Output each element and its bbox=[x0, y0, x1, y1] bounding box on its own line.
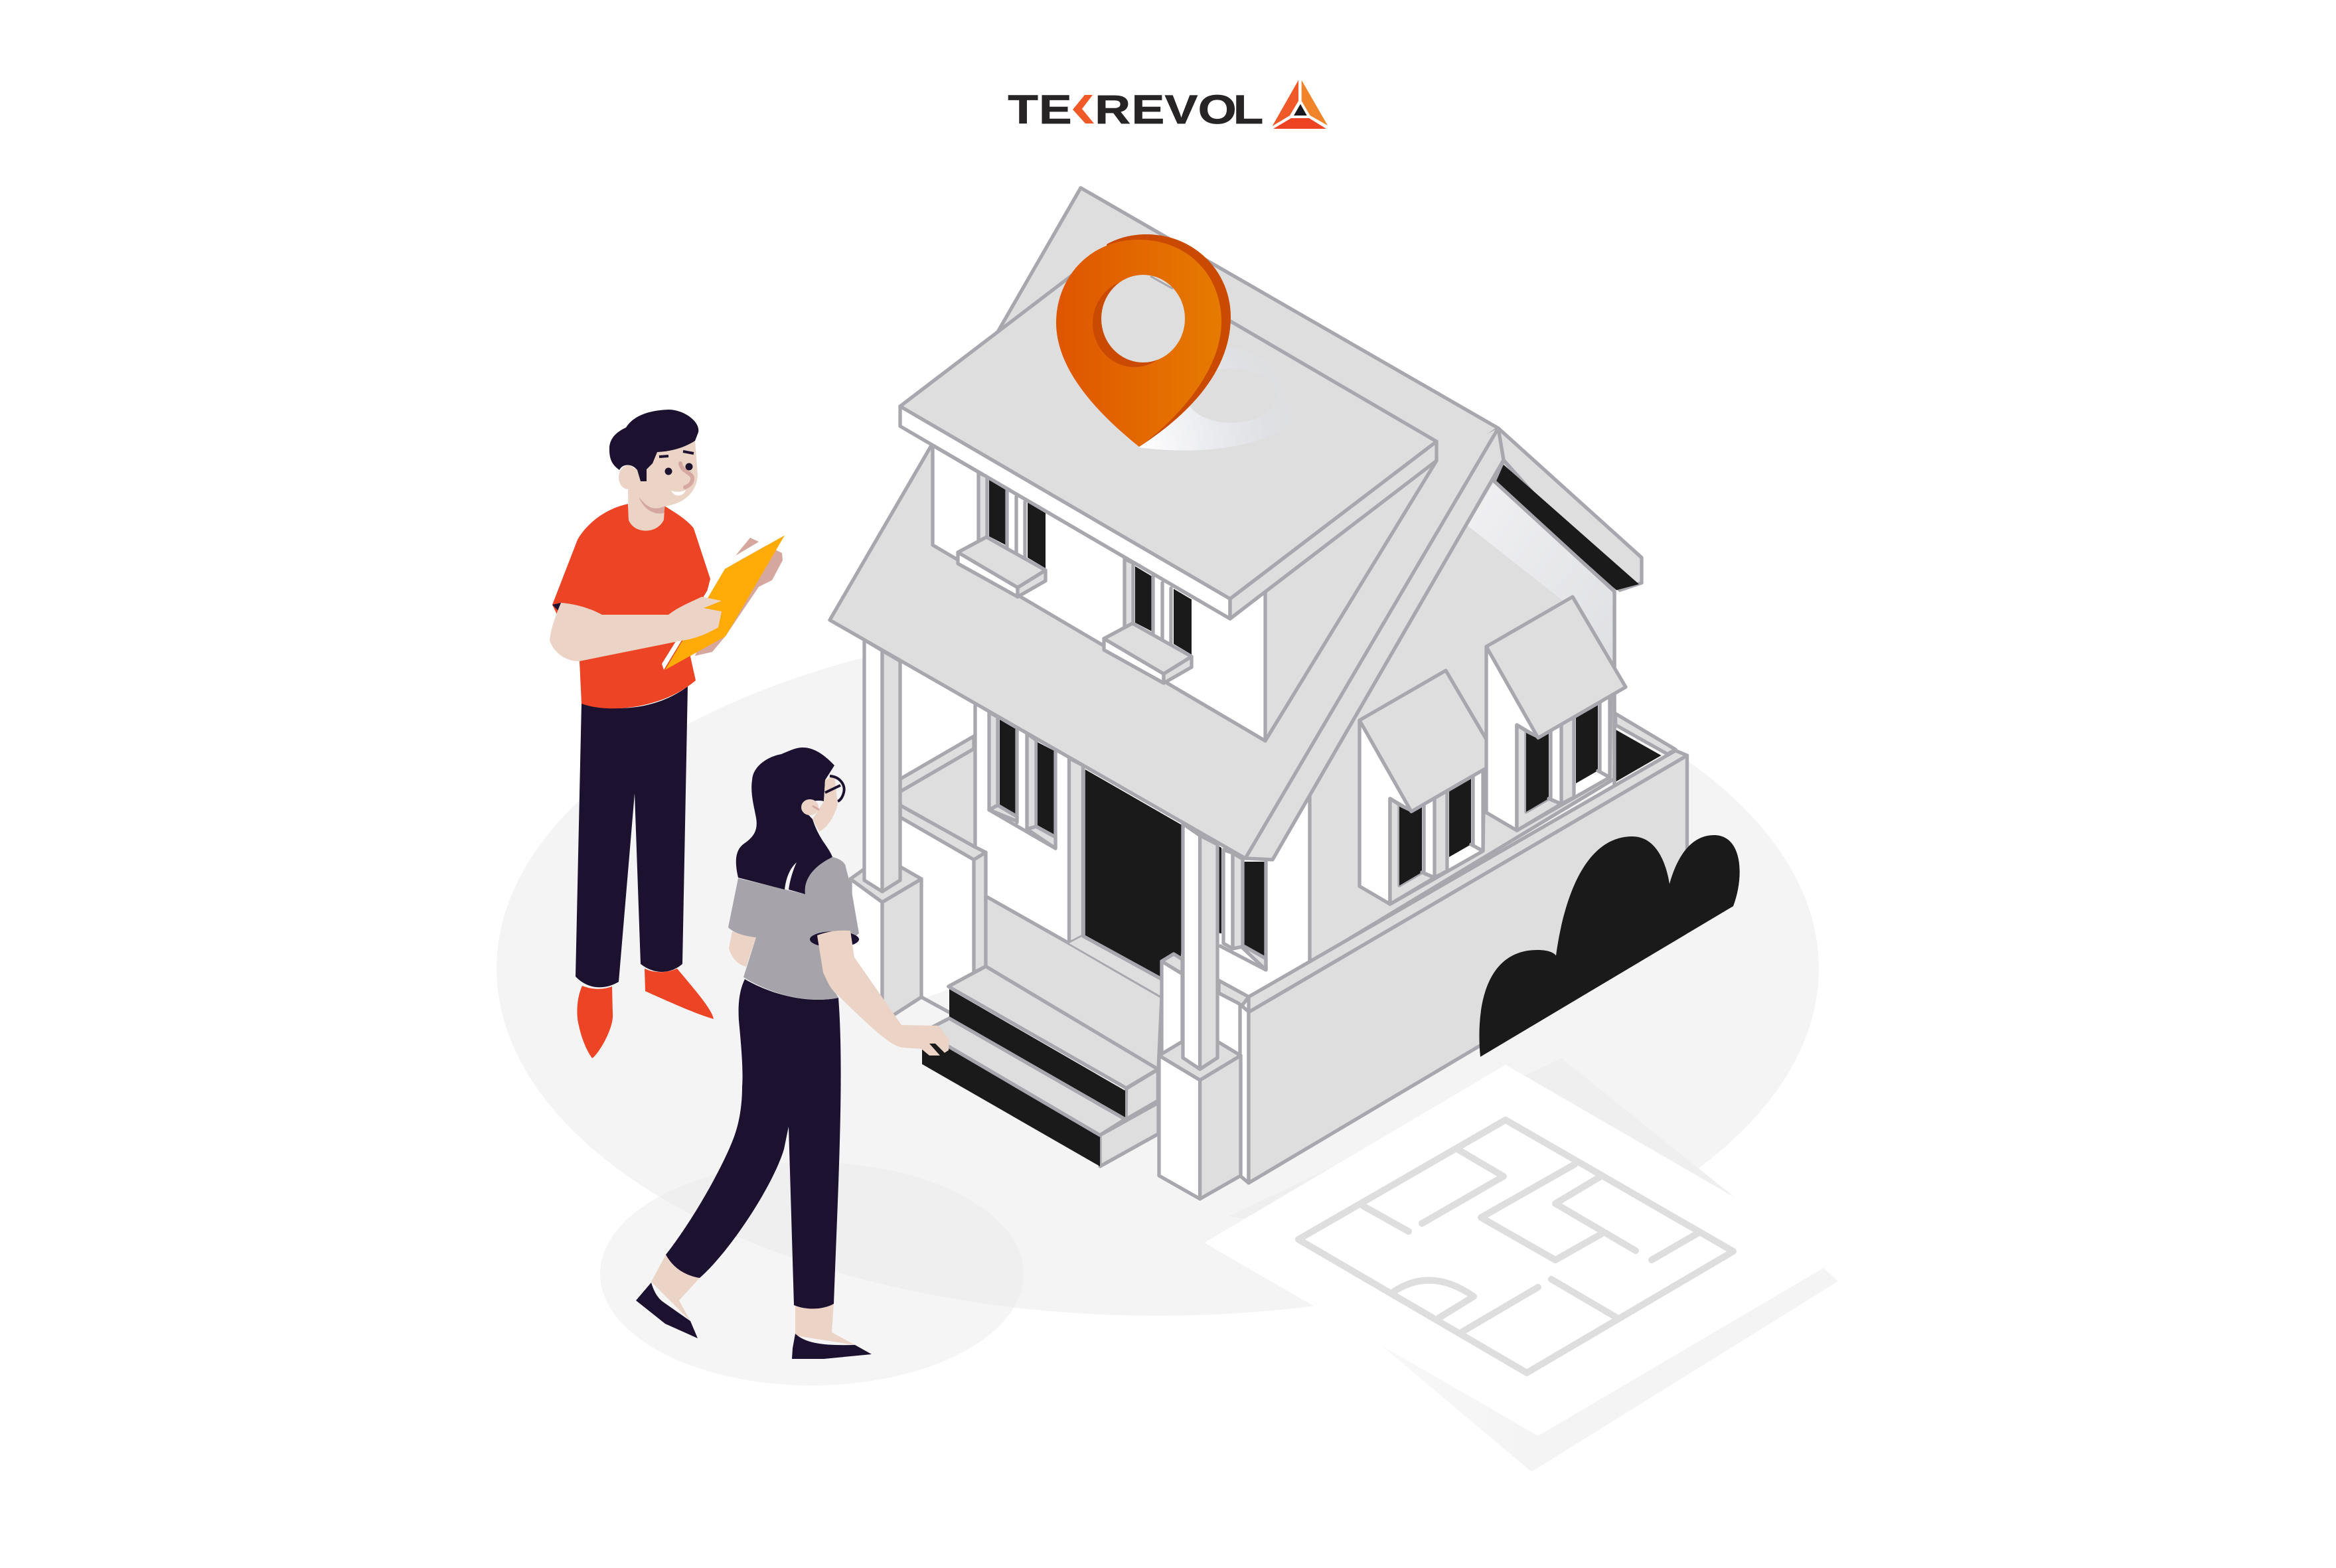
logo: TEKREVOL: TE bbox=[1008, 87, 1072, 132]
woman: shirt bbox=[728, 857, 859, 1000]
front porch column bbox=[1159, 824, 1241, 1199]
left porch column bbox=[850, 640, 921, 1022]
base wall bbox=[1240, 751, 1687, 1183]
woman: glasses bbox=[825, 776, 844, 801]
logo: TEKREVOL bbox=[1008, 80, 1328, 132]
man with folder bbox=[550, 410, 785, 1058]
gable wall with window slit bbox=[1310, 428, 1642, 963]
man: book backing hand bbox=[695, 538, 783, 656]
front small post and rail bbox=[1162, 954, 1249, 1056]
upper window right bbox=[1104, 559, 1192, 683]
woman walking bbox=[636, 747, 949, 1359]
man: folder bbox=[662, 535, 785, 670]
right lower window bbox=[1220, 850, 1266, 970]
background: small ellipse under woman bbox=[600, 1196, 1014, 1385]
dormer left bbox=[1360, 670, 1499, 904]
dormer right bbox=[1486, 597, 1626, 830]
front door bbox=[1069, 758, 1221, 979]
woman: hair bbox=[736, 747, 834, 894]
upper window left bbox=[958, 473, 1046, 597]
logo: TEKREVOL: REVOL bbox=[1095, 87, 1263, 132]
man: arm bbox=[550, 597, 722, 661]
shrub bbox=[1479, 835, 1740, 1057]
upper wall bbox=[933, 445, 1437, 741]
map pin bbox=[1056, 234, 1296, 451]
woman: pants bbox=[666, 979, 841, 1308]
lower window, left of door bbox=[989, 712, 1055, 848]
woman: skin legs bbox=[651, 1255, 855, 1345]
woman: left arm behind bbox=[729, 931, 756, 967]
pin shadow bbox=[1139, 347, 1296, 451]
floor plan lines bbox=[1298, 1120, 1733, 1373]
woman: face bbox=[801, 775, 844, 832]
porch floor bbox=[986, 896, 1162, 1089]
man: pants bbox=[576, 686, 688, 987]
man: head bbox=[609, 410, 698, 531]
man: shoes bbox=[577, 969, 714, 1058]
woman: right arm bbox=[817, 931, 949, 1056]
back porch rail bbox=[900, 706, 986, 973]
upper roof bbox=[900, 249, 1437, 619]
white porch mass bbox=[900, 661, 1310, 1129]
woman: sleeve opening bbox=[810, 931, 859, 947]
roof ridge band bbox=[1245, 428, 1504, 860]
blueprint sheet with floor plan bbox=[1204, 1058, 1839, 1472]
background: large ground ellipse bbox=[497, 621, 1819, 1316]
porch steps bbox=[921, 967, 1158, 1166]
back upper roof bbox=[998, 188, 1498, 597]
lower main roof bbox=[830, 428, 1498, 858]
man: shirt bbox=[552, 504, 710, 708]
rear terrace opening bbox=[1614, 710, 1675, 785]
woman: shoes bbox=[636, 1283, 872, 1359]
house bbox=[830, 188, 1740, 1199]
